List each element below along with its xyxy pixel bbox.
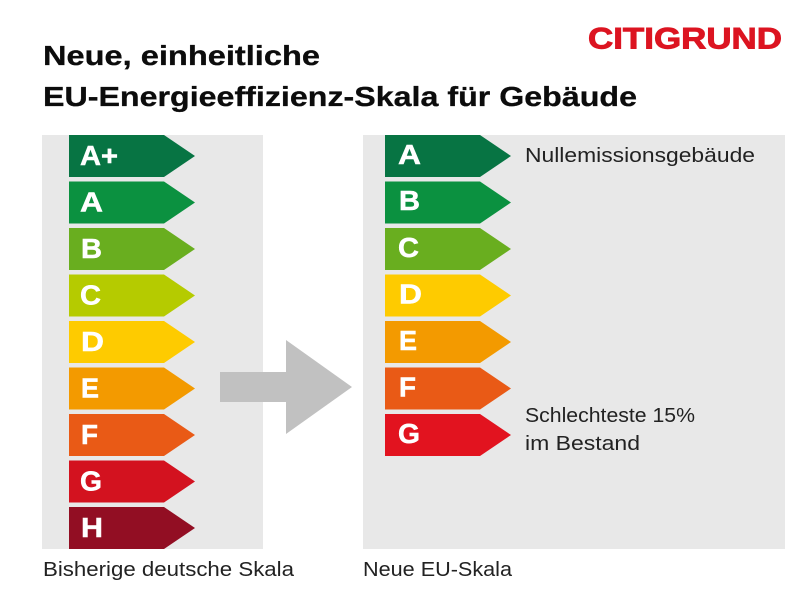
bar: B	[385, 182, 511, 224]
bar: D: D	[399, 278, 422, 310]
bar: E	[385, 321, 511, 363]
bar: E: E	[399, 325, 417, 356]
bar: E: E	[81, 372, 99, 404]
bar: A: A	[80, 186, 103, 218]
bar: C: C	[398, 232, 419, 263]
bar: H	[69, 507, 195, 549]
bar: G: G	[80, 466, 102, 496]
bar: G	[69, 460, 195, 502]
bar: H: H	[81, 512, 103, 543]
arrow	[220, 340, 352, 434]
logo: Citigrund: CITIGRUND	[588, 22, 782, 56]
bar: A	[385, 135, 511, 177]
bar: A: A	[398, 139, 421, 170]
bar: A	[69, 182, 195, 224]
bar: C: C	[80, 280, 101, 310]
bar: A+	[69, 135, 195, 177]
bar: C	[69, 274, 195, 316]
bar: B	[69, 228, 195, 270]
panel: neue EU-Skala	[363, 135, 785, 549]
label: Schlechteste 15% im Bestand: im Bestand	[525, 433, 640, 455]
panel: bisherige deutsche Skala	[42, 135, 263, 549]
bar: G: G	[398, 418, 420, 449]
bar: D	[69, 321, 195, 363]
title: Neue, einheitliche	[43, 40, 320, 71]
title	[43, 40, 637, 112]
bar: B: B	[399, 185, 420, 216]
bar: A+: A+	[80, 140, 118, 171]
bar: G	[385, 414, 511, 456]
bar: F: F	[399, 372, 416, 402]
title: EU-Energieeffizienz-Skala für Gebäude	[43, 81, 637, 112]
bar: D	[385, 274, 511, 316]
label: Schlechteste 15% im Bestand	[525, 405, 695, 455]
bar: F	[69, 414, 195, 456]
bar: C	[385, 228, 511, 270]
caption: Neue EU-Skala: Neue EU-Skala	[363, 559, 513, 581]
bar: F: F	[81, 419, 98, 450]
bar: E	[69, 368, 195, 410]
bar: F	[385, 368, 511, 410]
label: Nullemissionsgebäude: Nullemissionsgebäude	[525, 145, 755, 167]
label: Schlechteste 15% im Bestand: Schlechteste 15%	[525, 405, 695, 427]
bar: B: B	[81, 233, 102, 264]
bar: D: D	[81, 326, 104, 357]
caption: Bisherige deutsche Skala: Bisherige deutsche Skala	[43, 559, 295, 581]
